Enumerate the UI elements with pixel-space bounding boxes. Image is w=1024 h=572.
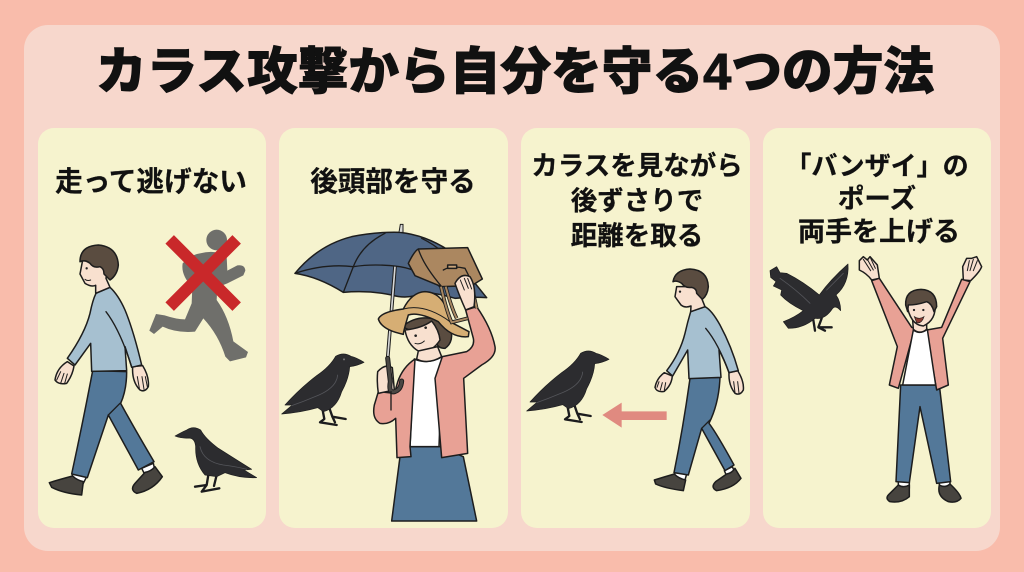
cardigan (374, 359, 415, 458)
handbag (408, 248, 482, 287)
hair and face (402, 318, 452, 348)
running silhouette with red cross (149, 230, 248, 361)
panel 3 heading (531, 151, 743, 251)
panel 3 heading: 後ずさりで (571, 186, 703, 216)
panel 3: back away while watching the crow (521, 128, 750, 528)
panel 4 heading: ポーズ (838, 184, 916, 214)
crow standing (175, 428, 257, 492)
woman with umbrella and bag (295, 224, 495, 521)
hat (378, 292, 469, 337)
panel 2 heading: 後頭部を守る (310, 166, 476, 197)
skirt (392, 447, 477, 521)
title: カラス攻撃から自分を守る4つの方法 (96, 43, 934, 100)
walking man (49, 245, 162, 495)
man raising both hands (859, 257, 982, 502)
crow flying (770, 264, 848, 331)
arrow pointing to crow (602, 403, 667, 428)
panel 2: protect the back of the head (279, 128, 508, 528)
panel 4 heading: 「バンザイ」の (785, 151, 969, 181)
panel 3 heading: 距離を取る (571, 221, 703, 251)
panel 1 heading: 走って逃げない (55, 166, 247, 197)
panel 4 heading (785, 151, 969, 247)
raised hand (455, 275, 475, 310)
panel 3 heading: カラスを見ながら (531, 151, 743, 181)
panel 1: do not run away (38, 128, 266, 528)
panel 4 heading: 両手を上げる (798, 217, 960, 247)
umbrella canopy (295, 232, 487, 298)
crow facing right (282, 354, 364, 425)
shirt (410, 357, 442, 447)
panel 4: banzai pose (763, 128, 991, 528)
hand with handle (377, 366, 394, 393)
man backing away (654, 269, 743, 491)
crow facing right (527, 351, 609, 422)
hands (859, 257, 982, 281)
